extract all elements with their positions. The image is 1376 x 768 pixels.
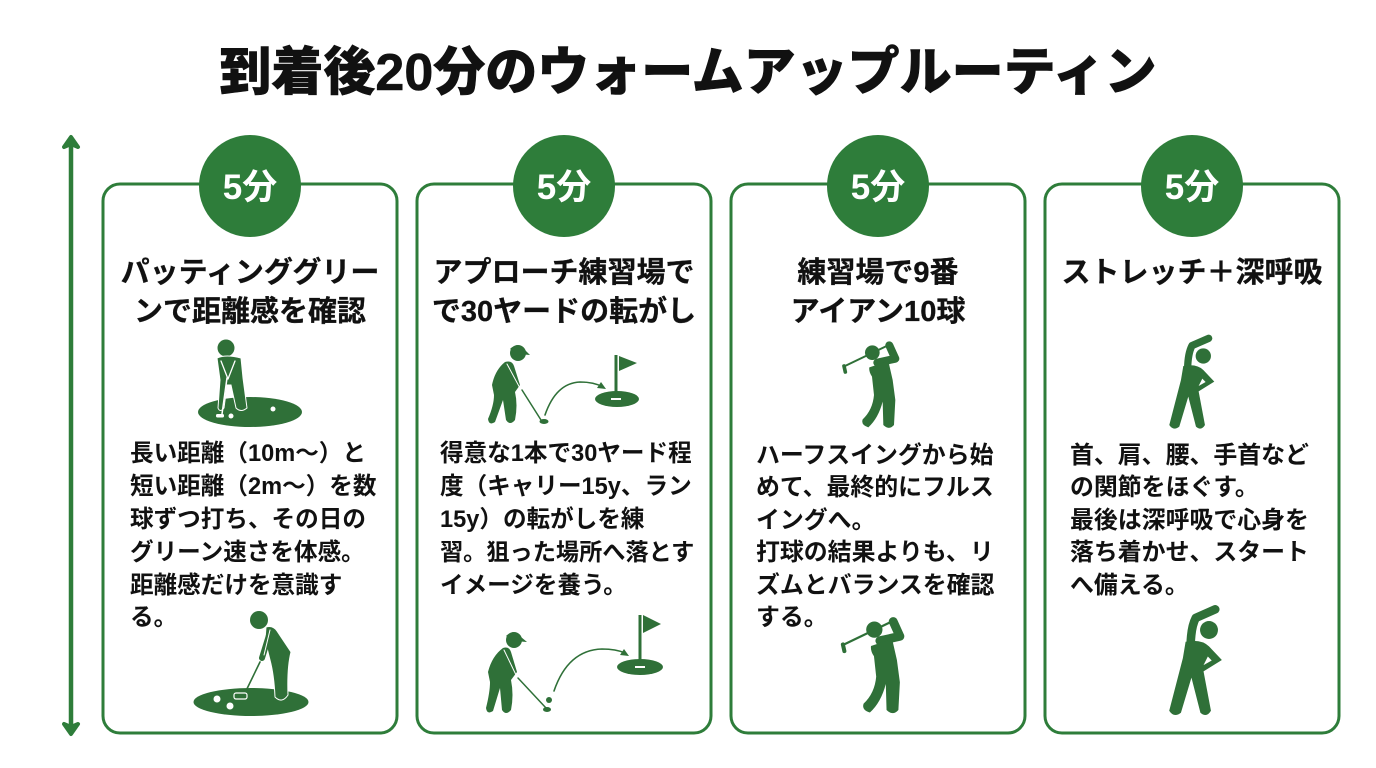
badge: 5 minutes	[827, 135, 929, 237]
badge: 5 minutes	[513, 135, 615, 237]
heading: putting green: パッティンググリー	[121, 256, 379, 289]
text: putting instructions: る。	[130, 605, 177, 631]
arrow: timeline double-headed	[64, 137, 78, 734]
heading: approach	[432, 256, 696, 328]
heading: range: 練習場で9番	[797, 256, 959, 289]
text: range instructions: する。	[756, 604, 828, 631]
text: approach instructions: イメージを養う。	[440, 572, 627, 599]
icon: golfer putting front view	[198, 340, 302, 427]
text: range instructions: ハーフスイングから始	[756, 441, 994, 469]
heading: stretching: ストレッチ＋深呼吸	[1061, 256, 1323, 289]
text: range instructions: めて、最終的にフルス	[756, 474, 994, 501]
icon: stretching figure	[1169, 338, 1214, 429]
panel: driving range	[731, 135, 1025, 733]
heading: putting green: ンで距離感を確認	[134, 295, 366, 328]
text: putting instructions: グリーン速さを体感。	[130, 538, 365, 566]
icon: stretching figure, lower	[1169, 609, 1222, 715]
text: putting instructions: 距離感だけを意識す	[130, 572, 342, 599]
heading: approach: アプローチ練習場で	[433, 256, 695, 289]
text: stretching instructions: 落ち着かせ、スタート	[1070, 539, 1309, 566]
text: range instructions: 打球の結果よりも、リ	[756, 539, 994, 566]
text: approach instructions: 15y）の転がしを練	[440, 505, 645, 533]
text: stretching instructions: 最後は深呼吸で心身を	[1070, 507, 1309, 534]
text: stretching instructions: の関節をほぐす。	[1070, 474, 1259, 501]
text: approach instructions: 得意な1本で30ヤード程	[440, 440, 692, 467]
badge: 5 minutes: 5分	[1165, 168, 1219, 207]
heading: range	[791, 256, 965, 328]
text: stretching instructions	[1070, 442, 1309, 599]
text: stretching instructions: へ備える。	[1070, 572, 1189, 599]
badge: 5 minutes: 5分	[851, 168, 905, 207]
badge: 5 minutes: 5分	[223, 168, 277, 207]
icon: golfer chipping to flag	[488, 345, 639, 424]
heading: range: アイアン10球	[791, 295, 965, 328]
text: approach instructions	[440, 440, 694, 599]
icon: golfer putting side view	[194, 611, 308, 716]
panel: putting green	[103, 135, 397, 733]
panel: stretching	[1045, 135, 1339, 733]
badge: 5 minutes: 5分	[537, 168, 591, 207]
text: putting instructions: 短い距離（2m〜）を数	[130, 473, 377, 500]
icon: golfer chipping with flag, lower	[486, 615, 663, 713]
icon: golfer backswing, lower	[843, 622, 900, 713]
text: stretching instructions: 首、肩、腰、手首など	[1070, 442, 1309, 469]
badge: 5 minutes	[1141, 135, 1243, 237]
badge: 5 minutes	[199, 135, 301, 237]
icon: golfer backswing	[844, 345, 895, 428]
text: approach instructions: 度（キャリー15y、ラン	[440, 473, 692, 500]
text: range instructions	[756, 441, 995, 631]
text: range instructions: イングへ。	[756, 506, 875, 534]
text: approach instructions: 習。狙った場所へ落とす	[440, 539, 694, 565]
text: range instructions: ズムとバランスを確認	[756, 571, 995, 599]
heading: approach: で30ヤードの転がし	[432, 294, 696, 328]
title: 到着後20分のウォームアップルーティン	[219, 44, 1157, 102]
heading: putting green	[121, 256, 379, 328]
panel: approach practice	[417, 135, 711, 733]
text: putting instructions: 球ずつ打ち、その日の	[130, 506, 366, 533]
text: putting instructions: 長い距離（10m〜）と	[130, 440, 366, 467]
text: putting instructions	[130, 440, 377, 631]
